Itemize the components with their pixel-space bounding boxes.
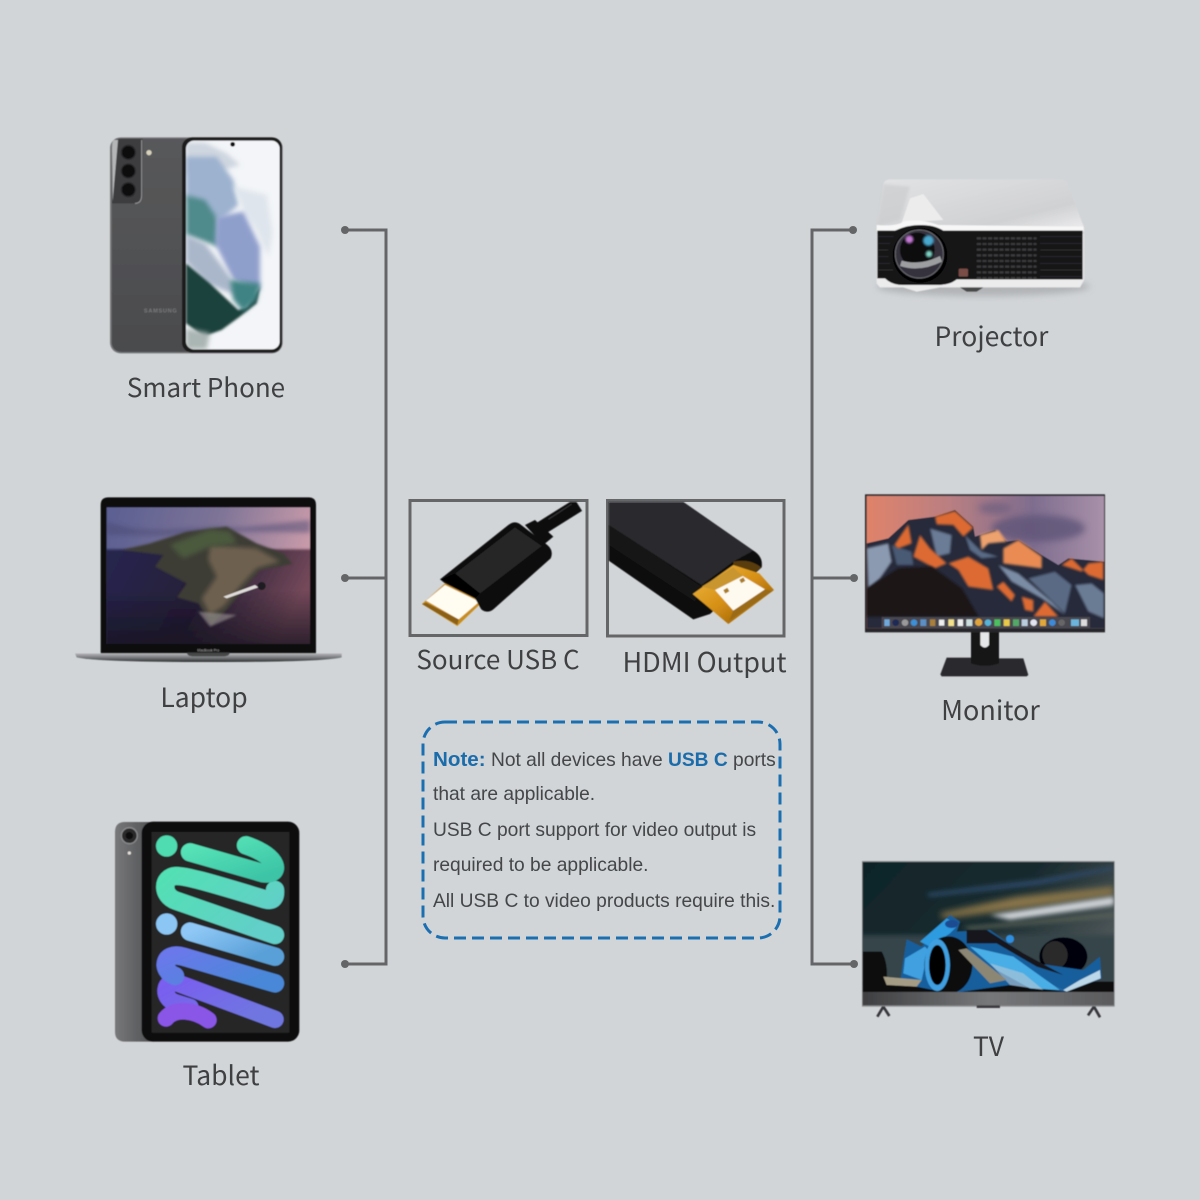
icon: tablet: [115, 822, 299, 1042]
left connector lines: [341, 226, 386, 968]
rear wheel: [1039, 937, 1088, 970]
frame: HDMI output: [608, 500, 784, 636]
label: laptop: Laptop: [160, 676, 248, 715]
icon: laptop: MacBook Pro: [197, 648, 219, 652]
label: smart phone: Smart Phone: [127, 368, 285, 405]
car body: [900, 915, 1102, 993]
front wheel: [924, 936, 972, 994]
note line 1: Note: Not all devices have USB C ports: [433, 748, 776, 771]
label: tablet: Tablet: [183, 1054, 259, 1093]
frame: source USB C: [410, 500, 587, 636]
note line 4: required to be applicable.: [433, 855, 648, 876]
note line 5: All USB C to video products require this.: [433, 891, 775, 912]
icon: smart phone: [110, 137, 283, 353]
note line 3: USB C port support for video output is: [433, 820, 756, 841]
label: projector: Projector: [935, 315, 1049, 354]
icon: HDMI connector: [609, 502, 774, 624]
label: source USB C: Source USB C: [416, 640, 580, 677]
icon: smart phone: SAMSUNG: [144, 309, 177, 315]
HDMI output panel: [608, 500, 784, 636]
label: monitor: Monitor: [941, 689, 1040, 728]
note line 2: that are applicable.: [433, 784, 595, 805]
source USB C panel: [410, 500, 587, 636]
label: TV: TV: [973, 1025, 1005, 1064]
icon: monitor: [865, 494, 1105, 676]
callout: note: [423, 722, 780, 938]
icon: USB C connector: [422, 504, 578, 626]
icon: laptop: [75, 497, 342, 662]
label: HDMI output: HDMI Output: [622, 641, 787, 680]
right connector lines: [812, 226, 858, 968]
icon: TV: [857, 861, 1120, 1017]
icon: projector: [877, 179, 1090, 296]
